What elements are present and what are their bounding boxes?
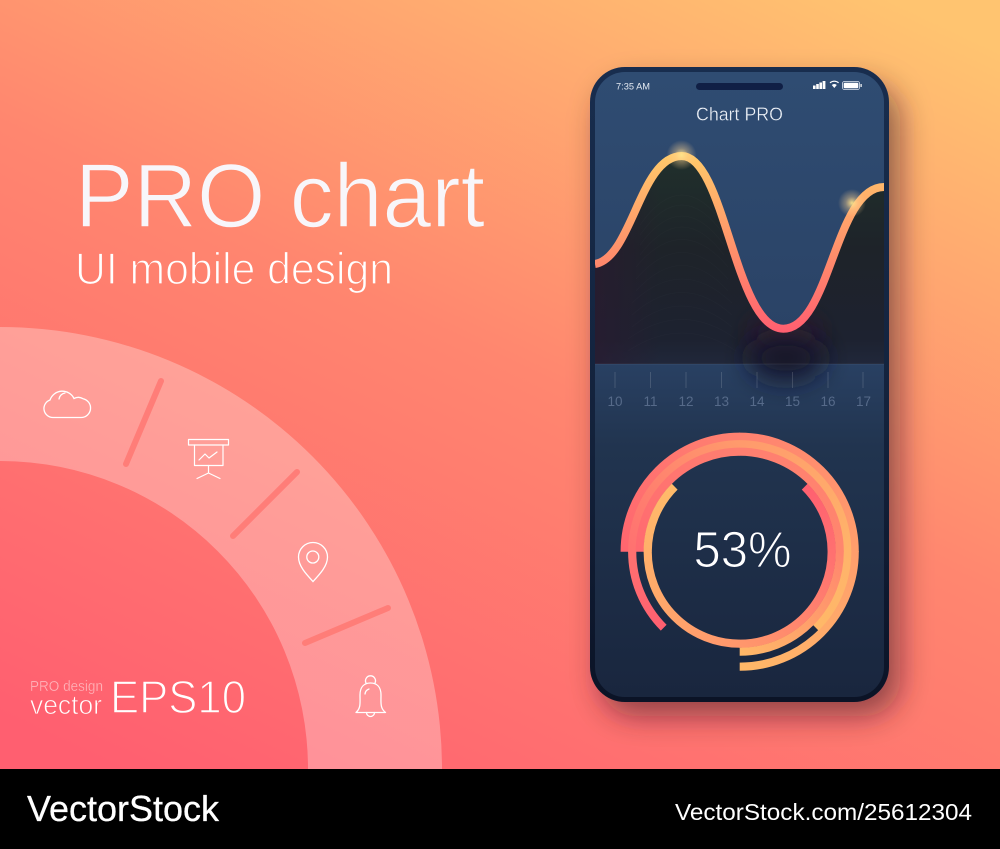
- ring: second: [640, 452, 840, 652]
- phone shadow: [600, 84, 900, 716]
- PRO design label: PRO design: [30, 679, 103, 695]
- glow: right point: [839, 190, 866, 216]
- axis labels: 16: [820, 394, 836, 409]
- icon: bell: [356, 676, 386, 716]
- phone speaker notch: [696, 83, 783, 90]
- footer bar: [0, 769, 1000, 849]
- axis ticks: [615, 372, 863, 388]
- baseline: [595, 364, 884, 365]
- area under curve: [595, 150, 884, 364]
- icon: location pin: [298, 542, 328, 582]
- icon: cloud: [44, 391, 91, 418]
- ring: third: [632, 444, 847, 628]
- axis labels: 17: [856, 394, 871, 409]
- text: EPS badge: [30, 671, 246, 723]
- ring band: [0, 327, 442, 769]
- icon: presentation board: [188, 440, 228, 478]
- phone screen: [595, 72, 884, 697]
- phone frame: [590, 67, 889, 702]
- chart: line chart: [595, 140, 884, 380]
- status icons: [813, 81, 862, 90]
- shadow below trough: [748, 336, 824, 380]
- axis labels: 14: [749, 394, 765, 409]
- axis labels: 13: [714, 394, 729, 409]
- axis labels: 11: [643, 394, 658, 409]
- screen title: Chart PRO: [696, 104, 783, 124]
- status time: 7:35 AM: [616, 82, 650, 92]
- percent value: 53%: [694, 521, 792, 578]
- axis labels: 10: [607, 394, 623, 409]
- footer logo: VectorStock: [27, 788, 220, 829]
- axis labels: 15: [785, 394, 800, 409]
- heading: PRO chart: [75, 146, 485, 247]
- chart: radial progress rings: [625, 437, 855, 667]
- EPS10 label: EPS10: [110, 671, 246, 723]
- menu dividers: [126, 381, 388, 643]
- glow: peak: [668, 141, 696, 169]
- axis labels: [607, 394, 871, 409]
- ring: inner: [648, 487, 832, 644]
- subheading: UI mobile design: [75, 245, 393, 294]
- curve line: [595, 156, 884, 329]
- panel: phone: [590, 67, 889, 702]
- footer url: VectorStock.com/25612304: [675, 799, 972, 825]
- vector label: vector: [30, 690, 102, 720]
- ring: outer: [625, 437, 855, 667]
- panel: curved icon menu: [0, 327, 442, 769]
- axis labels: 12: [678, 394, 694, 409]
